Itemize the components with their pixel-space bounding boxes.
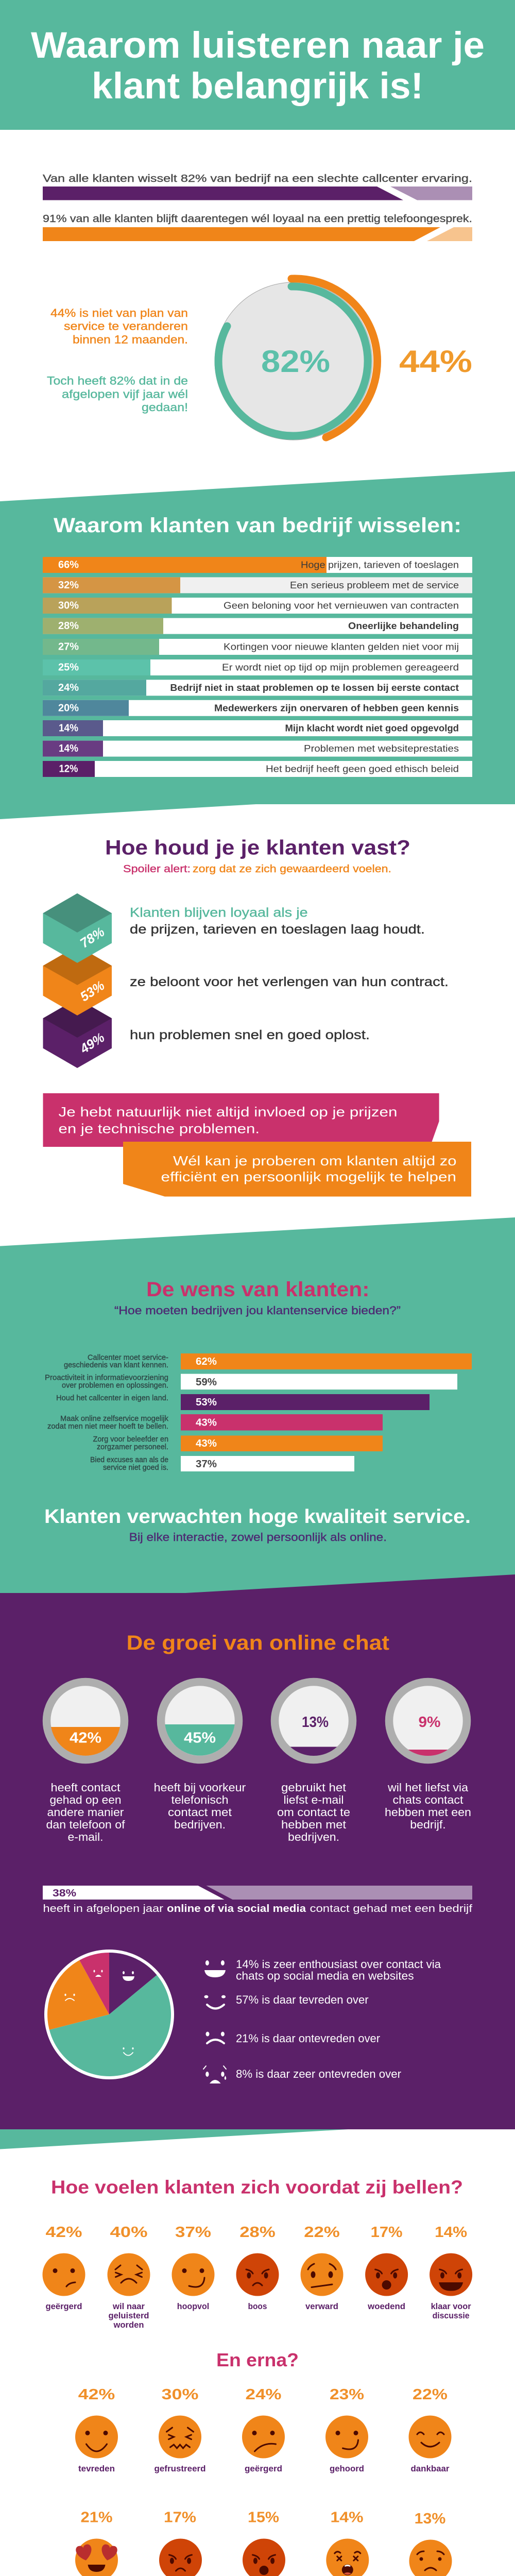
bar chart: redenen: 12%	[59, 764, 78, 775]
gauge: 9%: wil het liefst via	[387, 1781, 469, 1794]
gauge: 13%: om contact te	[277, 1806, 350, 1819]
emotion: klaar voor discussie 14%: discussie	[433, 2311, 470, 2320]
gauge: 42%: dan telefoon of	[46, 1818, 125, 1831]
emotion: verward 22%: 22%	[304, 2224, 340, 2241]
gauge: 42%: gehad op een	[49, 1793, 122, 1806]
bar chart: redenen: 30%	[58, 600, 79, 612]
text: 82% wel gedaan: Toch heeft 82% dat in de	[47, 374, 188, 387]
bar chart: redenen	[43, 557, 472, 777]
gauge: 13%: gebruikt het	[281, 1781, 346, 1794]
icon: pie happy	[123, 2047, 134, 2056]
panel: de wens van klanten	[0, 1217, 515, 1597]
emotion: tevreden 42%: tevreden	[78, 2464, 115, 2473]
emotion: tevreden 42%	[75, 2386, 118, 2473]
bar chart: redenen: Bedrijf niet in staat problemen op te lossen bij eerste contact	[170, 683, 459, 693]
title: klant belangrijk is!	[92, 66, 423, 107]
legend: ontevreden: 21% is daar ontevreden over	[236, 2032, 380, 2045]
legend: tevreden: 57% is daar tevreden over	[236, 1993, 369, 2006]
text: klanten blijven loyaal: hun problemen snel en goed oplost.	[130, 1028, 370, 1042]
bar chart: redenen: Oneerlijke behandeling	[348, 621, 459, 631]
emotion: boos 28%	[236, 2224, 279, 2311]
bar chart: redenen: 14%	[59, 743, 78, 754]
bar chart: redenen: Een serieus probleem met de service	[290, 580, 459, 590]
icon: pie very sad	[94, 1970, 103, 1977]
gauge: 42%: e-mail.	[68, 1831, 103, 1843]
callout: orange: efficiënt en persoonlijk mogelijk te helpen	[161, 1169, 456, 1184]
text: klanten blijven loyaal: Klanten blijven loyaal als je	[130, 906, 308, 920]
bar chart: wensen: 43%	[196, 1438, 217, 1449]
stat bar: 91% loyaal	[43, 213, 472, 241]
bar chart: wensen: Proactiviteit in informatievoorziening	[45, 1374, 168, 1382]
radial chart: 82% and 44%	[215, 279, 472, 440]
cube: 78%	[43, 893, 112, 963]
emotion: gehoord 23%: 23%	[330, 2386, 364, 2403]
emotion: boos 17%: 17%	[164, 2509, 196, 2526]
legend: zeer ontevreden	[203, 2066, 401, 2083]
bar chart: redenen: Problemen met websiteprestaties	[304, 743, 459, 754]
gauge: 13%: liefst e-mail	[283, 1793, 344, 1806]
cube: 53%: 53%	[77, 977, 107, 1005]
legend: zeer enthousiast	[204, 1958, 441, 1982]
stat bar: 38% social media: online of via social media	[167, 1903, 306, 1914]
bar chart: redenen: 14%	[59, 723, 78, 734]
gauge: 45%: heeft bij voorkeur	[154, 1781, 246, 1794]
stat bar: 38% social media: heeft in afgelopen jaar	[43, 1903, 163, 1914]
emotion: wil naar geluisterd worden 40%: worden	[113, 2320, 144, 2330]
stat bar: 82% wisselt: Van alle klanten wisselt 82% van bedrijf na een slechte callcenter ervaring.	[43, 173, 472, 184]
text: 44% niet van plan: 44% is niet van plan van	[50, 307, 188, 319]
text: 82% wel gedaan: gedaan!	[142, 401, 188, 414]
bar chart: wensen: 37%	[196, 1459, 217, 1470]
icon: very sad face	[203, 2066, 226, 2083]
emotion: gehoord 23%	[325, 2386, 368, 2473]
emotion: genegeerd 13%: 13%	[415, 2511, 446, 2527]
legend: tevreden	[204, 1993, 369, 2008]
emotion: geergerd 42%	[42, 2224, 85, 2311]
callout: orange	[123, 1142, 471, 1196]
gauge: 13%: hebben met	[281, 1818, 346, 1831]
statement: elke interactie: Bij elke interactie, zowel persoonlijk als online.	[129, 1531, 387, 1544]
legend: zeer enthousiast: chats op social media en websites	[236, 1969, 414, 1982]
bar chart: wensen: over problemen en oplossingen.	[62, 1381, 168, 1390]
stat bar: 38% social media: contact gehad met een bedrijf	[310, 1903, 473, 1914]
bar chart: wensen: Maak online zelfservice mogelijk	[60, 1414, 168, 1423]
teal wedge divider	[0, 2129, 348, 2149]
stat bar: 82% wisselt	[43, 173, 472, 200]
heading: Waarom klanten van bedrijf wisselen:	[54, 514, 461, 537]
pie chart: tevredenheid	[44, 1950, 174, 2079]
emotion: wil naar geluisterd worden 40%: 40%	[110, 2224, 148, 2241]
panel: de groei van online chat	[0, 1574, 515, 2129]
heading: hoe voelen klanten zich: Hoe voelen klanten zich voordat zij bellen?	[51, 2177, 463, 2198]
gauge: 45%: bedrijven.	[174, 1818, 226, 1831]
emotion: verward 14%: 14%	[331, 2509, 364, 2526]
emotions after calling	[70, 2386, 452, 2576]
emotion: hoopvol 37%	[172, 2224, 214, 2311]
text: 82% wel gedaan	[47, 374, 188, 414]
emotion: geergerd 42%: 42%	[45, 2224, 82, 2241]
bar chart: redenen: 25%	[58, 662, 79, 673]
emotion: woedend 15%: 15%	[248, 2509, 279, 2526]
text: klanten blijven loyaal: ze beloont voor het verlengen van hun contract.	[130, 975, 449, 989]
bar chart: wensen: zodat men niet meer hoeft te bellen.	[47, 1422, 168, 1431]
icon: pie very happy	[123, 1971, 134, 1981]
bar chart: redenen: Geen beloning voor het vernieuwen van contracten	[224, 601, 459, 611]
bar chart: wensen	[45, 1353, 472, 1472]
gauge: 13%	[275, 1682, 352, 1843]
emotion: woedend 15%	[243, 2509, 285, 2576]
subheading: spoiler alert	[123, 863, 391, 875]
gauge: 45%: 45%	[184, 1730, 216, 1747]
subheading: spoiler alert: zorg dat ze zich gewaardeerd voelen.	[193, 863, 391, 875]
emotion: woedend 17%: woedend	[367, 2301, 405, 2311]
bar chart: redenen: 28%	[58, 620, 79, 632]
gauge: 45%: telefonisch	[171, 1793, 229, 1806]
heading: hoe houd je klanten vast: Hoe houd je je klanten vast?	[105, 837, 410, 859]
emotion: woedend 17%	[365, 2224, 408, 2311]
legend: zeer ontevreden: 8% is daar zeer ontevreden over	[236, 2067, 401, 2080]
emotion: boos 28%: 28%	[239, 2224, 276, 2241]
header banner	[0, 0, 515, 130]
bar chart: wensen: 53%	[196, 1397, 217, 1408]
emotion: woedend 17%: 17%	[371, 2224, 403, 2241]
subheading: “Hoe moeten bedrijven jou klantenservice bieden?”	[114, 1304, 401, 1317]
gauge: 13%: 13%	[302, 1714, 329, 1731]
bar chart: redenen: 27%	[58, 641, 79, 653]
emotion: verward 14%	[326, 2509, 369, 2576]
emotion: gewaardeerd 21%	[70, 2509, 124, 2576]
title	[31, 25, 485, 107]
emotion: gefrustreerd 30%: gefrustreerd	[154, 2464, 206, 2473]
cube: 53%	[43, 946, 112, 1015]
bar chart: wensen: service niet goed is.	[103, 1463, 168, 1472]
callout: pink: en je technische problemen.	[59, 1121, 260, 1137]
emotion: verward 22%: verward	[305, 2301, 338, 2311]
emotion: gefrustreerd 30%: 30%	[162, 2386, 199, 2403]
emotion: geergerd 42%: geërgerd	[45, 2301, 82, 2311]
panel: waarom klanten wisselen	[0, 471, 515, 819]
emotion: gehoord 23%: gehoord	[330, 2464, 364, 2473]
emotion: gefrustreerd 30%	[154, 2386, 206, 2473]
statement: hoge kwaliteit: Klanten verwachten hoge kwaliteit service.	[44, 1506, 471, 1528]
emotions before calling	[42, 2224, 472, 2330]
gauge: 9%: chats contact	[392, 1793, 464, 1806]
emotion: wil naar geluisterd worden 40%: wil naar	[112, 2301, 145, 2311]
heading: De groei van online chat	[127, 1632, 389, 1654]
callout: orange: Wél kan je proberen om klanten altijd zo	[173, 1153, 456, 1168]
gauge: 42%: heeft contact	[50, 1781, 121, 1794]
bar chart: wensen: 59%	[196, 1377, 217, 1388]
bar chart: wensen: Zorg voor beleefder en	[93, 1435, 168, 1444]
stat bar: 38% social media	[43, 1886, 473, 1914]
bar chart: wensen: zorgzamer personeel.	[97, 1443, 168, 1451]
heading: en erna: En erna?	[216, 2349, 299, 2370]
emotion: geergerd 24%: 24%	[245, 2386, 282, 2403]
gauge: 45%	[154, 1682, 246, 1831]
gauge: 42%	[46, 1682, 125, 1843]
emotion: hoopvol 37%: 37%	[175, 2224, 211, 2241]
icon: happy face	[204, 1995, 226, 2008]
emotion: gewaardeerd 21%: 21%	[80, 2509, 113, 2526]
text: 44% niet van plan: service te veranderen	[64, 319, 188, 333]
callout: pink	[43, 1093, 439, 1147]
text: klanten blijven loyaal: de prijzen, tarieven en toeslagen laag houdt.	[130, 922, 425, 937]
radial chart: 82% and 44%: 44%	[399, 344, 472, 379]
emotion: dankbaar 22%: 22%	[413, 2386, 448, 2403]
bar chart: wensen: Bied excuses aan als de	[90, 1455, 168, 1464]
cube: 78%: 78%	[77, 924, 107, 951]
emotion: dankbaar 22%: dankbaar	[411, 2464, 450, 2473]
gauge: 9%: bedrijf.	[410, 1818, 446, 1831]
bar chart: wensen: 62%	[196, 1356, 217, 1367]
emotion: boos 28%: boos	[248, 2301, 267, 2311]
bar chart: redenen: Hoge prijzen, tarieven of toeslagen	[301, 560, 459, 570]
text: 44% niet van plan: binnen 12 maanden.	[73, 333, 188, 346]
emotion: boos 17%	[159, 2509, 202, 2576]
radial chart: 82% and 44%: 82%	[261, 344, 330, 379]
cube: 49%: 49%	[77, 1029, 107, 1057]
bar chart: redenen: 20%	[58, 702, 79, 714]
gauge: 9%	[385, 1682, 471, 1831]
gauge: 45%: contact met	[168, 1806, 232, 1819]
bar chart: redenen: Het bedrijf heeft geen goed ethisch beleid	[266, 764, 459, 774]
stat bar: 38% social media: 38%	[53, 1888, 76, 1899]
gauge: 9%: hebben met een	[385, 1806, 471, 1819]
bar chart: redenen: Er wordt niet op tijd op mijn problemen gereageerd	[222, 663, 459, 673]
emotion: geergerd 24%: geërgerd	[245, 2464, 282, 2473]
emotion: klaar voor discussie 14%: klaar voor	[431, 2301, 471, 2311]
icon: sad face	[206, 2032, 225, 2043]
stat bar: 91% loyaal: 91% van alle klanten blijft daarentegen wél loyaal na een prettig telefoongesprek.	[43, 213, 472, 225]
emotion: tevreden 42%: 42%	[78, 2386, 115, 2403]
gauge: 13%: bedrijven.	[288, 1831, 339, 1843]
emotion: hoopvol 37%: hoopvol	[177, 2301, 209, 2311]
emotion: verward 22%	[301, 2224, 343, 2311]
bar chart: redenen: 32%	[58, 580, 79, 591]
legend: zeer enthousiast: 14% is zeer enthousiast over contact via	[236, 1958, 441, 1971]
subheading: spoiler alert: Spoiler alert:	[123, 863, 191, 875]
heading: De wens van klanten:	[146, 1278, 370, 1301]
bar chart: redenen: Mijn klacht wordt niet goed opgevolgd	[285, 723, 459, 734]
bar chart: redenen: Kortingen voor nieuwe klanten gelden niet voor mij	[224, 642, 459, 652]
emotion: klaar voor discussie 14%	[430, 2224, 472, 2320]
emotion: geergerd 24%	[242, 2386, 285, 2473]
bar chart: wensen: 43%	[196, 1417, 217, 1428]
emotion: wil naar geluisterd worden 40%: geluisterd	[108, 2311, 149, 2320]
bar chart: wensen: Callcenter moet service-	[88, 1353, 168, 1362]
bar chart: redenen: 24%	[58, 682, 79, 693]
emotion: wil naar geluisterd worden 40%	[107, 2224, 150, 2330]
title: Waarom luisteren naar je	[31, 25, 485, 66]
bar chart: redenen: Medewerkers zijn onervaren of hebben geen kennis	[214, 703, 459, 713]
text: 82% wel gedaan: afgelopen vijf jaar wél	[62, 387, 188, 401]
emotion: genegeerd 13%	[407, 2511, 452, 2576]
gauge: 9%: 9%	[418, 1714, 441, 1731]
cube: 49%	[43, 998, 112, 1068]
bar chart: redenen: 66%	[58, 560, 79, 571]
emotion: klaar voor discussie 14%: 14%	[435, 2224, 467, 2241]
text: klanten blijven loyaal	[130, 906, 449, 1042]
icon: very happy face	[204, 1960, 226, 1977]
emotion: dankbaar 22%	[409, 2386, 451, 2473]
icon: pie sad	[64, 1994, 75, 2001]
gauge: 42%: andere manier	[47, 1806, 124, 1819]
gauge: 42%: 42%	[70, 1730, 101, 1747]
callout: pink: Je hebt natuurlijk niet altijd invloed op je prijzen	[59, 1104, 398, 1120]
bar chart: wensen: geschiedenis van klant kennen.	[64, 1361, 168, 1369]
bar chart: wensen: Houd het callcenter in eigen land.	[56, 1394, 168, 1402]
text: 44% niet van plan	[50, 307, 188, 346]
